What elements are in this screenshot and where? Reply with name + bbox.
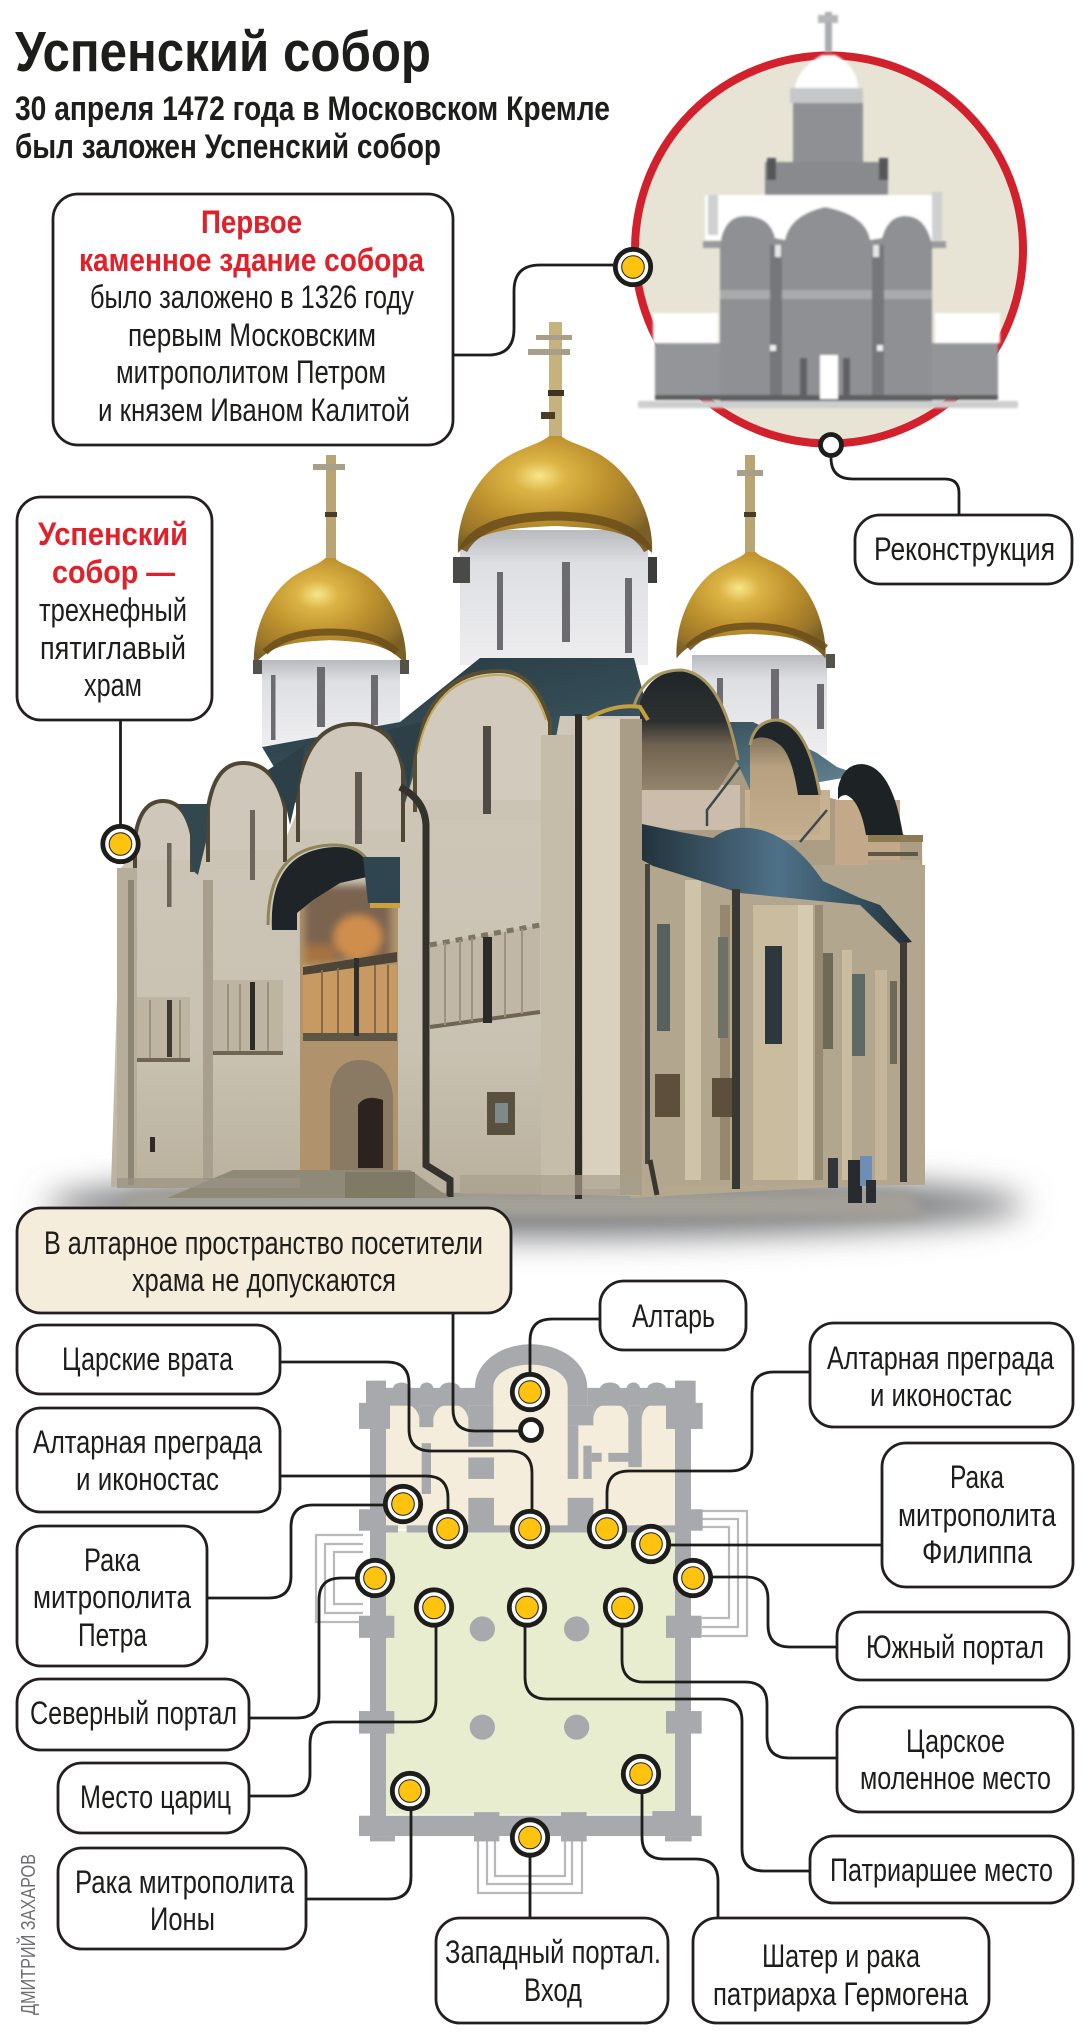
connector: reconstruction <box>831 456 959 515</box>
callout: first stone building: первым Московским <box>128 317 376 353</box>
narrow windows <box>167 843 172 907</box>
connector: south portal <box>710 1577 837 1647</box>
connector: right iconostasis <box>607 1372 810 1512</box>
label: Philip shrine: Рака <box>950 1459 1004 1495</box>
altar zone <box>386 1406 675 1529</box>
front facade <box>111 671 648 1199</box>
label: Peter shrine: Рака <box>84 1542 140 1578</box>
lower wall bands <box>645 865 925 1185</box>
marker: patriarch <box>509 1590 545 1625</box>
title: Успенский собор <box>15 20 431 84</box>
callout: reconstruction <box>855 515 1072 584</box>
label: Hermogenes <box>693 1918 989 2023</box>
marker: Peter shrine <box>385 1486 421 1522</box>
label: Peter shrine: Петра <box>78 1617 147 1653</box>
gables <box>135 801 192 870</box>
left pier and bay seams <box>117 868 137 1188</box>
callout: Uspensky cathedral: собор — <box>52 554 175 590</box>
ground <box>120 1192 925 1218</box>
floor plan <box>316 1344 747 1893</box>
left dome <box>253 455 409 745</box>
label: south portal <box>837 1612 1069 1680</box>
label: royal doors <box>17 1325 280 1394</box>
label: left iconostasis <box>17 1408 280 1512</box>
callout: first stone building: было заложено в 1326 году <box>90 279 414 315</box>
label: north portal: Северный портал <box>30 1695 237 1731</box>
marker: tsar <box>605 1590 641 1625</box>
callout: first stone building <box>53 194 453 445</box>
walls <box>359 1344 703 1841</box>
people <box>828 1156 876 1203</box>
label: Philip shrine: митрополита <box>898 1497 1056 1533</box>
label: royal doors: Царские врата <box>62 1341 233 1377</box>
ground shadow <box>45 1173 1025 1237</box>
callout: Uspensky cathedral <box>17 497 212 720</box>
note: altar access <box>17 1208 511 1313</box>
marker: south portal <box>675 1560 711 1596</box>
callout: Uspensky cathedral: храм <box>84 667 142 703</box>
note: altar access: В алтарное пространство посетители <box>44 1225 483 1261</box>
upper wall patches <box>640 785 740 830</box>
label: altar: Алтарь <box>632 1298 715 1334</box>
callout: Uspensky cathedral: пятиглавый <box>40 630 186 666</box>
marker: Hermogenes <box>623 1756 659 1792</box>
nave zone <box>386 1531 675 1815</box>
label: altar <box>600 1281 746 1350</box>
right pilaster <box>583 719 620 1189</box>
drain pipes <box>645 864 650 1164</box>
steps <box>167 1170 450 1198</box>
porch roof <box>642 824 912 944</box>
label: west portal: Вход <box>524 1972 582 2008</box>
label: tsar prayer place <box>837 1707 1073 1812</box>
marker: altar <box>512 1374 548 1410</box>
label: place of tsarinas: Место цариц <box>80 1779 231 1815</box>
connector: place of tsarinas <box>249 1625 436 1796</box>
connector: tsar prayer place <box>622 1625 837 1758</box>
subtitle: 30 апреля 1472 года в Московском Кремле <box>15 90 610 128</box>
marker: royal doors <box>512 1511 548 1547</box>
callout: first stone building: и князем Иваном Калитой <box>98 392 410 428</box>
label: left iconostasis: Алтарная преграда <box>33 1424 262 1460</box>
cover gable seams <box>137 800 548 880</box>
connector: patriarch place <box>525 1625 810 1871</box>
label: south portal: Южный портал <box>866 1629 1044 1665</box>
arcade belts <box>137 997 190 1060</box>
label: west portal <box>436 1918 668 2023</box>
label: patriarch place <box>810 1836 1073 1903</box>
label: left iconostasis: и иконостас <box>76 1461 219 1497</box>
connector: Uspensky cathedral <box>119 720 122 826</box>
callout: first stone building: каменное здание собора <box>79 242 424 278</box>
central dome <box>453 322 657 665</box>
right side wall <box>630 670 925 1198</box>
connector: first building <box>453 265 613 355</box>
connector: Philip shrine <box>668 1544 882 1546</box>
portal steps <box>316 1511 747 1893</box>
label: place of tsarinas <box>58 1763 249 1833</box>
side windows <box>657 924 670 1031</box>
subtitle <box>15 90 610 166</box>
connector: left iconostasis <box>280 1476 448 1512</box>
label: Peter shrine: митрополита <box>33 1579 191 1615</box>
apse interior <box>493 1365 568 1406</box>
north porch with frescoes <box>268 845 400 1173</box>
label: west portal: Западный портал. <box>445 1934 661 1970</box>
right dome <box>676 455 835 755</box>
callout: Uspensky cathedral: трехнефный <box>39 592 187 628</box>
label: Jonah shrine: Ионы <box>150 1901 215 1937</box>
label: Peter shrine <box>17 1526 207 1666</box>
connector: no entry note <box>453 1313 520 1431</box>
plan markers <box>357 1374 711 1855</box>
callout: first stone building: Первое <box>201 204 302 240</box>
label: Philip shrine <box>882 1443 1073 1587</box>
connector: royal doors <box>280 1362 532 1512</box>
subtitle: был заложен Успенский собор <box>15 128 441 166</box>
medallion circle <box>635 56 1023 444</box>
marker: no entry <box>520 1420 542 1440</box>
front drain pipe <box>400 787 450 1197</box>
small window <box>487 1092 515 1135</box>
slate roof <box>262 658 860 810</box>
marker: reconstruction <box>820 434 842 456</box>
callout: Uspensky cathedral: Успенский <box>38 516 188 552</box>
connector: west portal <box>529 1855 531 1918</box>
cathedral illustration <box>45 322 1025 1237</box>
marker: left iconostasis <box>430 1511 466 1547</box>
label: Hermogenes: Шатер и рака <box>762 1938 920 1974</box>
connector: Peter shrine <box>207 1505 386 1598</box>
connector: Jonah shrine <box>306 1808 411 1899</box>
marker: Uspensky cathedral <box>103 826 138 862</box>
label: Jonah shrine: Рака митрополита <box>75 1864 294 1900</box>
marker: tsarinas <box>416 1590 452 1625</box>
callout: first stone building: митрополитом Петром <box>116 354 386 390</box>
connector: altar <box>530 1319 600 1375</box>
label: Jonah shrine <box>58 1848 306 1949</box>
label: north portal <box>17 1679 249 1750</box>
label: Philip shrine: Филиппа <box>922 1534 1032 1570</box>
note: altar access: храма не допускаются <box>132 1262 396 1298</box>
label: right iconostasis <box>810 1323 1073 1427</box>
marker: right iconostasis <box>589 1511 625 1547</box>
slate between gables <box>178 804 208 875</box>
credit: ДМИТРИЙ ЗАХАРОВ <box>16 1854 40 2015</box>
label: right iconostasis: и иконостас <box>870 1377 1012 1413</box>
base <box>117 1178 300 1188</box>
reconstruction medallion <box>615 12 1023 456</box>
marker: north portal <box>357 1560 393 1596</box>
label: Hermogenes: патриарха Гермогена <box>713 1976 968 2012</box>
columns <box>470 1616 495 1641</box>
reconstruction elevation drawing <box>638 12 1018 408</box>
connector: north portal <box>249 1578 358 1718</box>
connector: Hermogenes <box>642 1791 718 1918</box>
arches <box>640 671 737 790</box>
marker: west portal <box>512 1820 548 1855</box>
label: tsar prayer place: Царское <box>906 1723 1005 1759</box>
marker: first stone building <box>615 249 651 285</box>
marker: Jonah shrine <box>392 1773 428 1809</box>
marker: Philip shrine <box>633 1526 669 1562</box>
